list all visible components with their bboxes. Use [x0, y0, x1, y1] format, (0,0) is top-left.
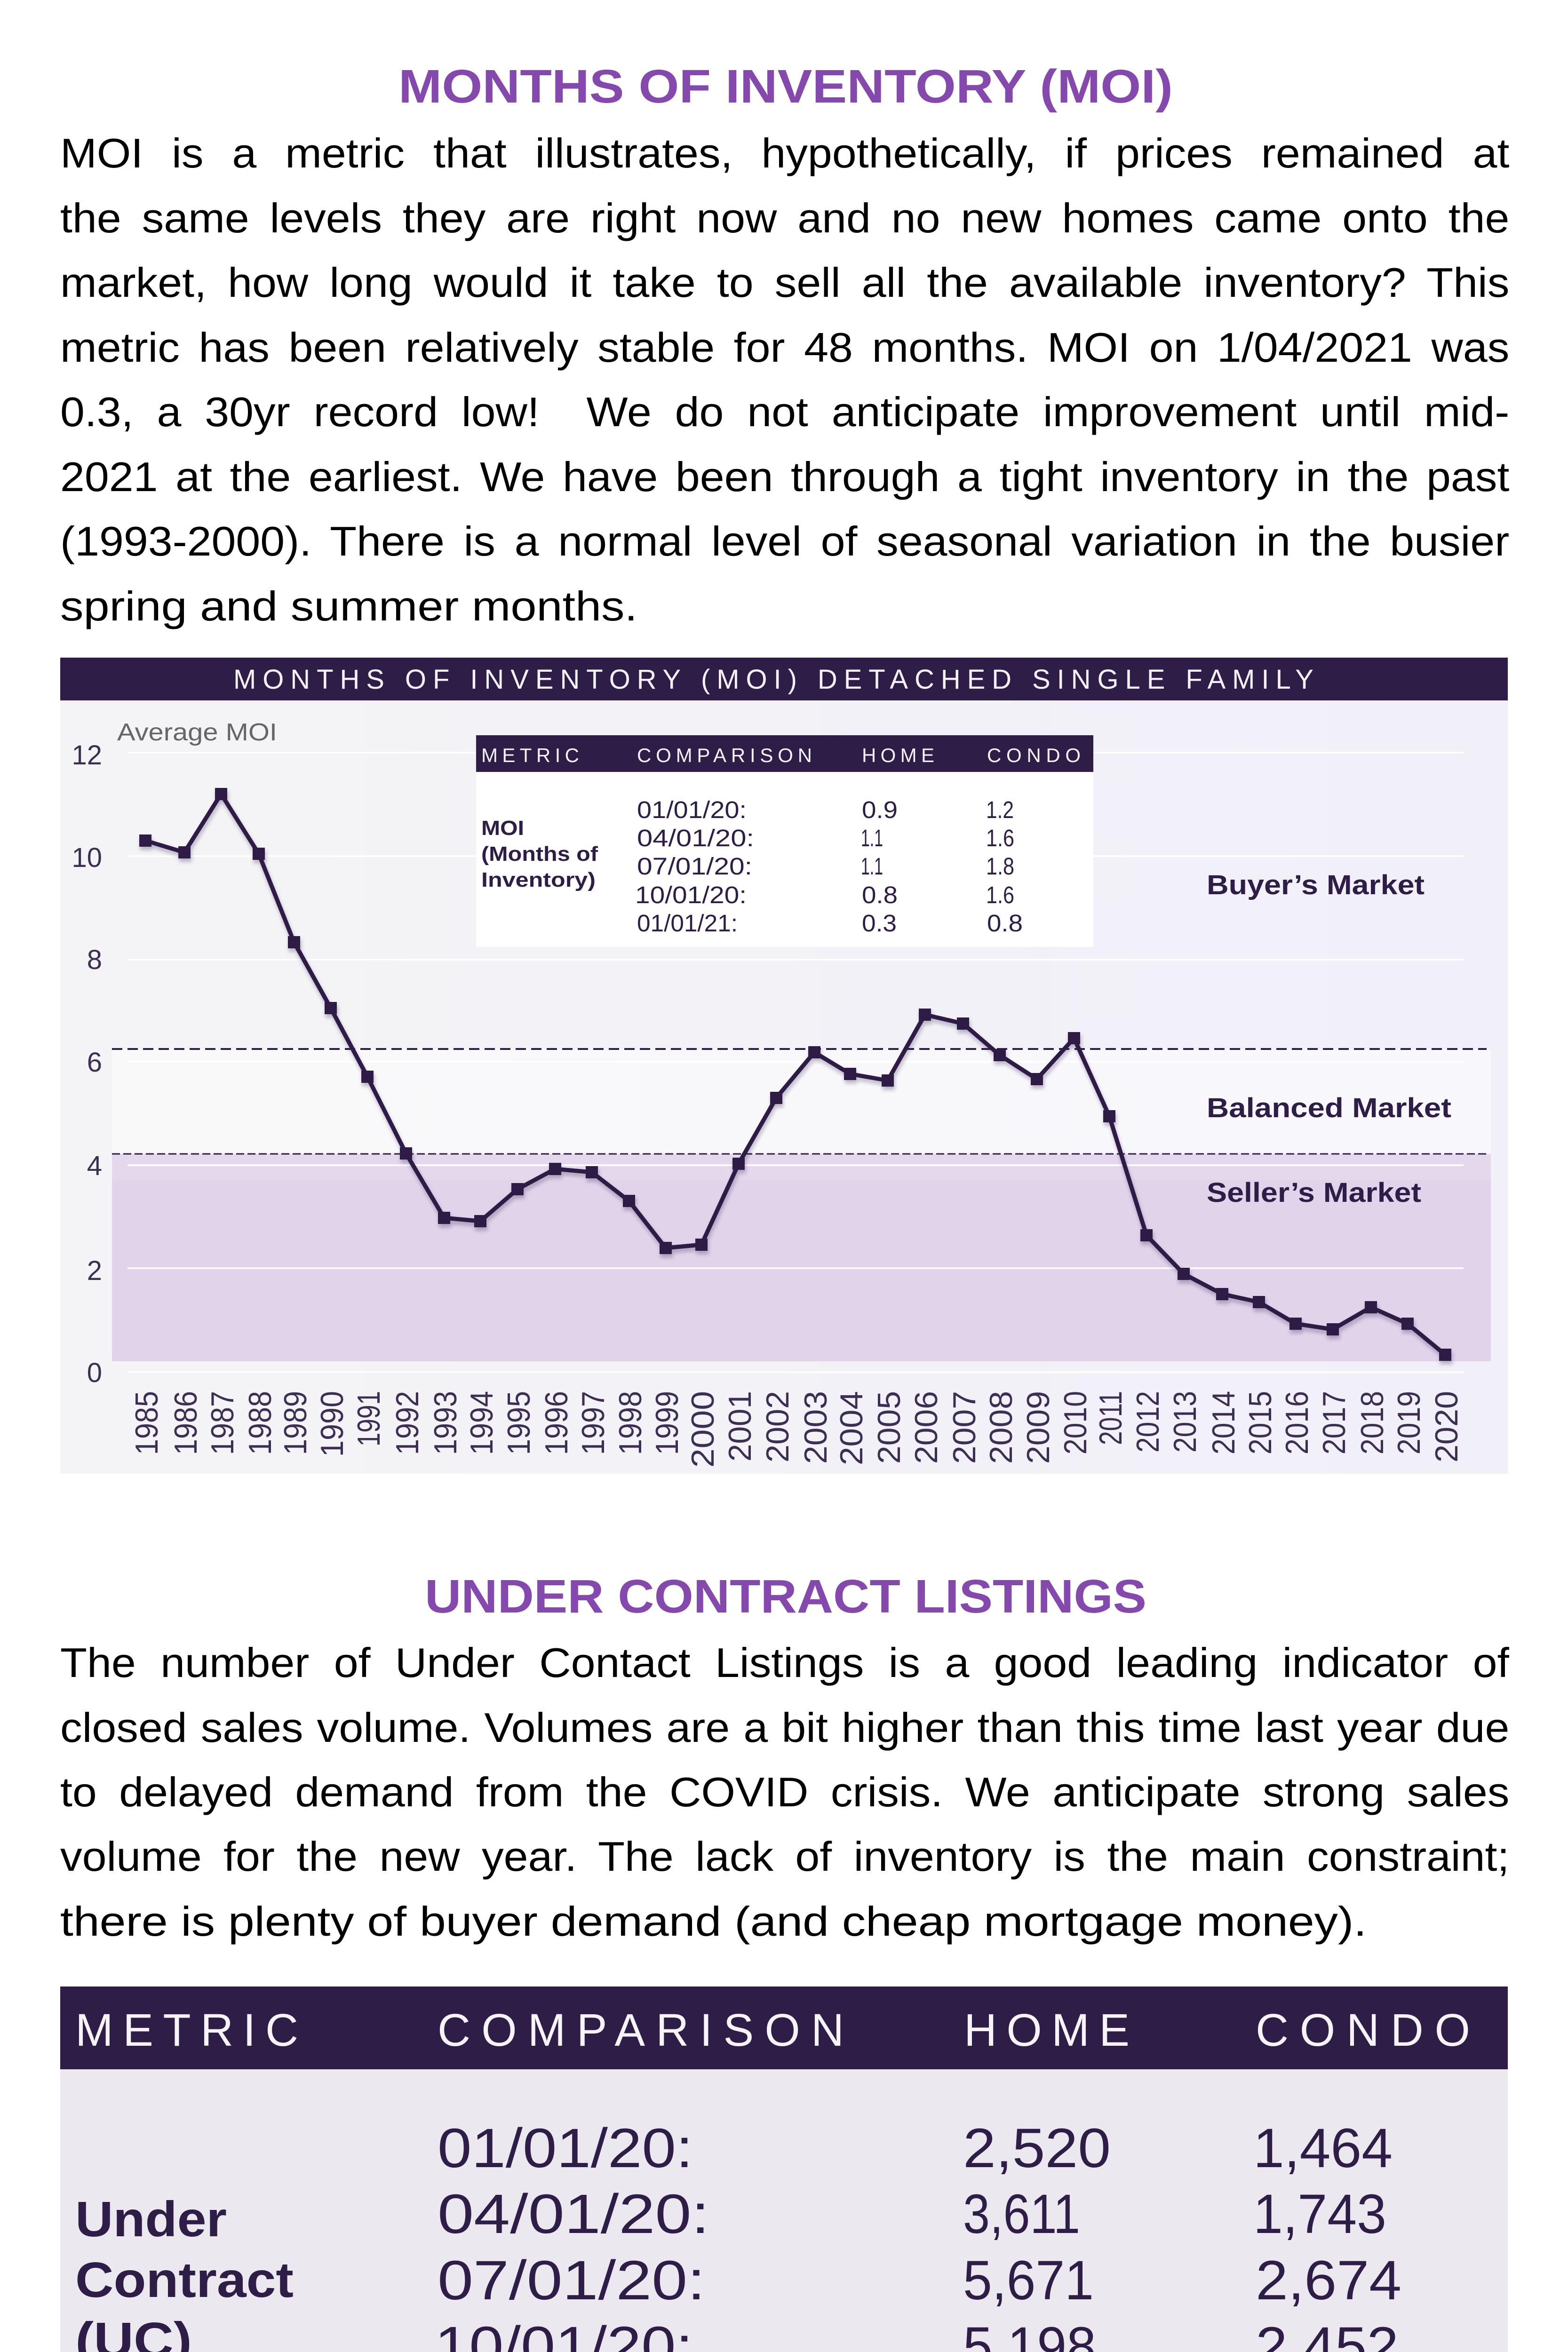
x axis year labels: 2007 [947, 1391, 982, 1464]
x axis year labels: 1995 [501, 1391, 537, 1455]
home values: 5,671 [963, 2249, 1094, 2312]
inset table: MOI comparison: 1.2 [986, 796, 1014, 823]
row label: Under [75, 2192, 227, 2247]
inset table: MOI comparison: 1.6 [986, 825, 1014, 851]
x axis year labels: 1993 [428, 1391, 463, 1455]
text block: under contract explanation: closed sales volume. Volumes are a bit higher than this time last year due [60, 1704, 1509, 1751]
x axis year labels: 2012 [1130, 1391, 1166, 1453]
y axis labels: 12 [72, 740, 102, 771]
table header labels [75, 2004, 1470, 2056]
inset table: MOI comparison: 04/01/20: [637, 825, 754, 851]
x axis year labels: 2001 [722, 1391, 758, 1462]
x axis year labels: 2005 [871, 1391, 907, 1464]
home values [963, 2117, 1111, 2352]
comparison dates: 07/01/20: [438, 2249, 705, 2312]
heading: months of inventory: MONTHS OF INVENTORY (MOI) [398, 60, 1173, 113]
text block: under contract explanation: there is plenty of buyer demand (and cheap mortgage money). [60, 1898, 1367, 1945]
inset table: MOI comparison [476, 735, 1093, 947]
inset table: MOI comparison: 10/01/20: [635, 882, 747, 908]
y axis labels: 6 [87, 1047, 102, 1078]
table header labels: HOME [964, 2004, 1130, 2056]
text block: MOI explanation: metric has been relatively stable for 48 months. MOI on 1/04/2021 was [60, 324, 1509, 371]
condo values: 1,464 [1253, 2117, 1393, 2179]
x axis year labels: 2019 [1391, 1391, 1427, 1454]
condo values [1253, 2117, 1401, 2352]
text block: under contract explanation: volume for the new year. The lack of inventory is the main constraint; [60, 1833, 1509, 1880]
comparison dates [435, 2117, 709, 2352]
row label: Contract [75, 2252, 294, 2308]
table header labels: CONDO [1256, 2004, 1470, 2056]
text block: under contract explanation: The number of Under Contact Listings is a good leading indicator of [60, 1639, 1509, 1686]
x axis year labels: 1987 [205, 1391, 240, 1455]
x axis year labels: 1998 [613, 1391, 648, 1455]
x axis year labels: 2017 [1316, 1391, 1352, 1454]
x axis year labels: 1997 [575, 1391, 611, 1455]
y axis labels: 4 [87, 1151, 102, 1181]
inset table: MOI comparison: 1.1 [861, 853, 883, 880]
x axis year labels: 2020 [1429, 1391, 1465, 1462]
inset table: MOI comparison: METRIC [481, 744, 579, 766]
market zone labels: Balanced Market [1207, 1093, 1451, 1123]
inset table: MOI comparison: COMPARISON [637, 744, 812, 766]
x axis year labels: 2000 [685, 1391, 721, 1468]
x axis year labels: 2014 [1206, 1391, 1242, 1454]
chart header band: MONTHS OF INVENTORY (MOI) DETACHED SINGLE FAMILY [233, 664, 1313, 695]
band: seller's market [112, 1154, 1491, 1361]
inset table: MOI comparison: (Months of [481, 842, 598, 866]
y axis labels: 8 [87, 945, 102, 975]
x axis year labels: 2004 [834, 1391, 869, 1465]
x axis year labels: 1992 [390, 1391, 425, 1455]
x axis year labels: 2018 [1354, 1391, 1390, 1454]
x axis year labels: 1986 [168, 1391, 204, 1455]
text block: MOI explanation: spring and summer months. [60, 583, 637, 629]
x axis year labels: 1996 [539, 1391, 574, 1455]
text block: MOI explanation: MOI is a metric that illustrates, hypothetically, if prices remained at [60, 130, 1509, 176]
x axis year labels: 2002 [760, 1391, 796, 1462]
comparison dates: 01/01/20: [438, 2117, 693, 2179]
inset table: MOI comparison: CONDO [987, 744, 1081, 766]
x axis year labels: 1985 [129, 1391, 165, 1455]
comparison dates: 04/01/20: [438, 2183, 709, 2245]
heading: under contract listings: UNDER CONTRACT LISTINGS [425, 1570, 1146, 1623]
inset table: MOI comparison: 07/01/20: [637, 853, 752, 880]
x axis year labels [129, 1391, 1465, 1468]
panel: MOI line chart [60, 658, 1508, 1474]
text block: MOI explanation: (1993-2000). There is a normal level of seasonal variation in the busier [60, 518, 1509, 564]
x axis year labels: 2013 [1167, 1391, 1203, 1453]
inset table: MOI comparison: Inventory) [481, 868, 596, 891]
market zone labels: Seller’s Market [1207, 1177, 1421, 1208]
x axis year labels: 2011 [1093, 1391, 1129, 1445]
x axis year labels: 2008 [983, 1391, 1019, 1464]
inset table: MOI comparison: 1.8 [986, 853, 1014, 880]
x axis year labels: 2010 [1058, 1391, 1093, 1454]
condo values: 1,743 [1253, 2183, 1386, 2245]
y axis labels: 2 [87, 1255, 102, 1286]
line series: average MOI 1985-2020 [139, 788, 1451, 1361]
inset table: MOI comparison: 01/01/21: [637, 910, 738, 937]
market zone labels: Buyer’s Market [1207, 870, 1425, 900]
inset table: MOI comparison: 01/01/20: [637, 796, 747, 823]
inset table: MOI comparison: 0.8 [987, 910, 1023, 937]
x axis year labels: 2015 [1242, 1391, 1278, 1454]
text block: MOI explanation: 2021 at the earliest. We have been through a tight inventory in the past [60, 453, 1509, 500]
condo values: 2,674 [1256, 2249, 1401, 2312]
x axis year labels: 1999 [649, 1391, 685, 1455]
inset table: MOI comparison: 0.3 [862, 910, 897, 937]
x axis year labels: 2009 [1020, 1391, 1056, 1464]
text block: under contract explanation [60, 1630, 1509, 1954]
x axis year labels: 1988 [242, 1391, 278, 1455]
inset table: MOI comparison: 0.8 [862, 882, 898, 908]
home values: 2,520 [963, 2117, 1111, 2179]
inset table: MOI comparison: 1.1 [861, 825, 883, 851]
band: balanced market [112, 1049, 1491, 1154]
text block: under contract explanation: to delayed demand from the COVID crisis. We anticipate strong sales [60, 1769, 1509, 1815]
x axis year labels: 1990 [314, 1391, 350, 1457]
table header labels: COMPARISON [438, 2004, 844, 2056]
gridlines [127, 753, 1464, 1372]
text block: MOI explanation: 0.3, a 30yr record low! We do not anticipate improvement until mid- [60, 389, 1509, 435]
x axis year labels: 2016 [1279, 1391, 1315, 1454]
chart header band [60, 658, 1508, 700]
x axis year labels: 2003 [798, 1391, 834, 1464]
x axis year labels: 2006 [908, 1391, 944, 1464]
y axis labels: 10 [72, 842, 102, 873]
y axis labels: 0 [87, 1358, 102, 1388]
x axis year labels: 1991 [351, 1391, 387, 1446]
table header labels: METRIC [75, 2004, 298, 2056]
chart background [60, 700, 1508, 1474]
x axis year labels: 1994 [464, 1391, 500, 1455]
home values: 3,611 [963, 2183, 1080, 2245]
y axis labels [72, 740, 102, 1388]
inset table: MOI comparison: HOME [862, 744, 934, 766]
dashed threshold lines [112, 1049, 1487, 1154]
x axis year labels: 1989 [278, 1391, 313, 1455]
market zone labels [1207, 870, 1451, 1208]
text block: MOI explanation [60, 121, 1509, 639]
text block: MOI explanation: market, how long would it take to sell all the available inventory? This [60, 259, 1509, 306]
inset table: MOI comparison: MOI [481, 817, 524, 840]
text block: MOI explanation: the same levels they are right now and no new homes came onto the [60, 195, 1509, 241]
table: under contract comparison [60, 1986, 1508, 2352]
row label [75, 2192, 294, 2352]
inset table: MOI comparison: 1.6 [986, 882, 1014, 908]
axis title: Average MOI [117, 719, 277, 746]
inset table: MOI comparison: 0.9 [862, 796, 898, 823]
